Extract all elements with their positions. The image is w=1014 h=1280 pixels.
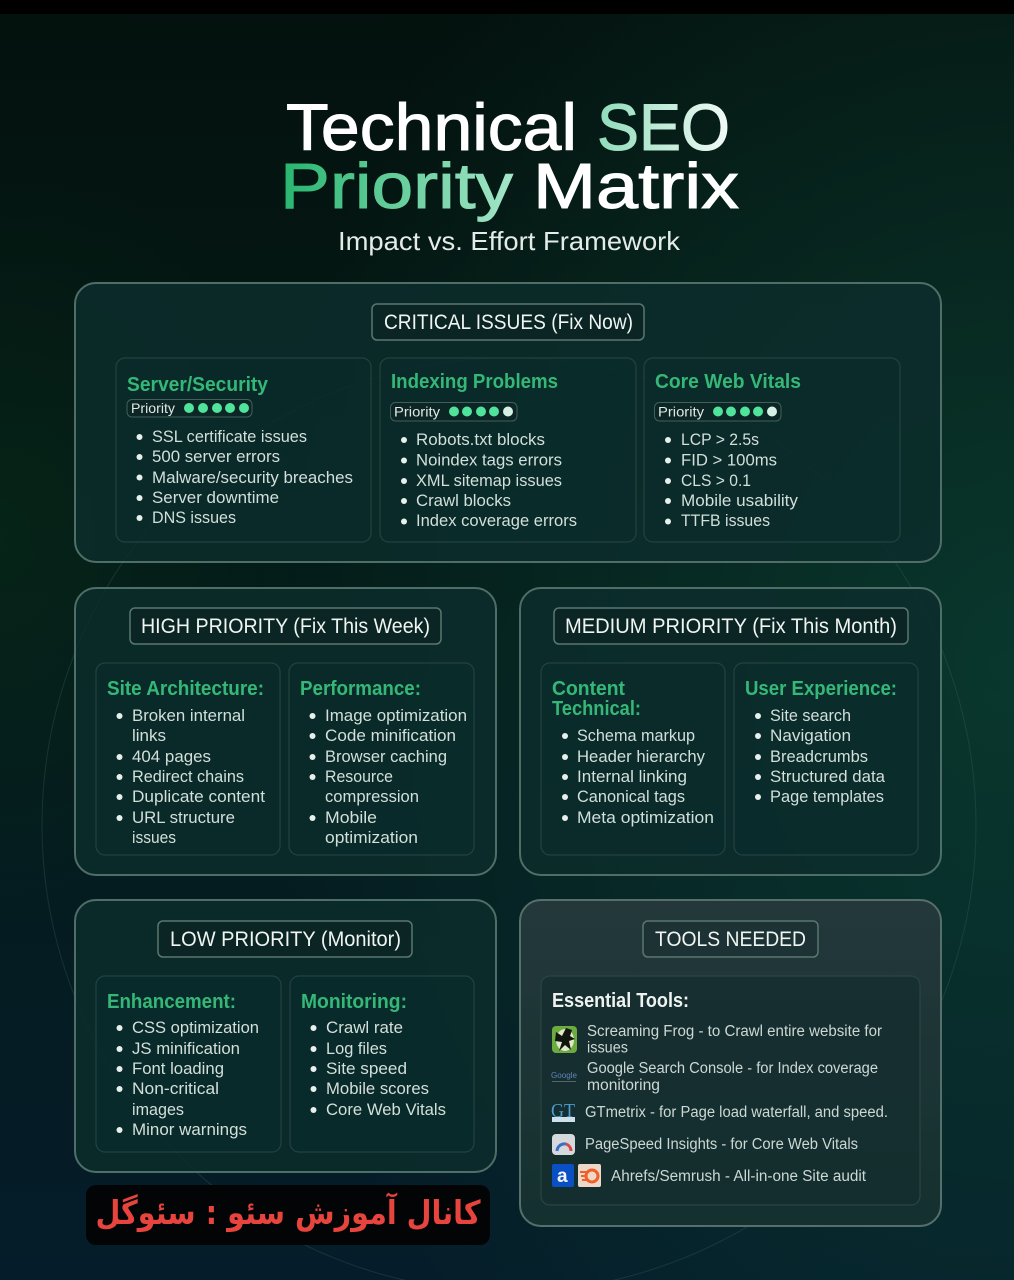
sub-panel: enhancement: CSS optimization	[132, 1018, 259, 1037]
sub-panel: user experience: User Experience:	[745, 678, 897, 700]
sub-panel: server/security: 500 server errors	[152, 447, 280, 466]
sub-panel: user experience: Structured data	[770, 767, 886, 786]
sub-panel: core web vitals: FID > 100ms	[681, 450, 777, 470]
sub-panel: performance: Performance:	[300, 678, 421, 700]
text: screaming frog	[587, 1023, 882, 1056]
sub-panel: indexing problems: Robots.txt blocks	[416, 430, 545, 449]
sub-panel: user experience: Page templates	[770, 787, 884, 806]
icon: gtmetrix: GT	[551, 1100, 575, 1122]
sub-panel: site architecture: issues	[132, 828, 176, 847]
sub-panel: user experience	[734, 663, 918, 855]
sub-panel: performance: optimization	[325, 828, 418, 847]
heading: critical issues: CRITICAL ISSUES (Fix Now)	[384, 311, 633, 334]
icon: ahrefs	[552, 1164, 574, 1187]
sub-panel: core web vitals: Core Web Vitals	[655, 371, 801, 393]
sub-panel: content technical: Schema markup	[577, 726, 695, 745]
sub-panel: performance: Mobile	[325, 808, 377, 827]
text: google search console: monitoring	[587, 1077, 660, 1094]
panel: high priority	[75, 588, 496, 875]
callout: persian channel label: کانال آموزش سئو : سئوگل	[95, 1192, 481, 1233]
sub-panel: essential tools	[541, 976, 920, 1205]
heading: tools needed: TOOLS NEEDED	[655, 928, 806, 951]
heading: low priority: LOW PRIORITY (Monitor)	[170, 928, 401, 951]
text: ahrefs/semrush: Ahrefs/Semrush - All-in-one Site audit	[611, 1168, 867, 1185]
sub-panel: monitoring: Log files	[326, 1039, 387, 1058]
sub-panel: monitoring: Crawl rate	[326, 1018, 403, 1037]
panel: critical issues	[75, 283, 941, 562]
callout: persian channel label	[86, 1185, 490, 1245]
sub-panel: user experience: Navigation	[770, 726, 851, 745]
sub-panel: indexing problems: Index coverage errors	[416, 511, 577, 530]
heading: critical issues	[372, 304, 644, 340]
sub-panel: content technical: Technical:	[552, 698, 641, 720]
panel: medium priority	[520, 588, 941, 875]
heading: low priority	[158, 921, 412, 957]
sub-panel: monitoring: Core Web Vitals	[326, 1100, 446, 1119]
sub-panel: indexing problems	[380, 358, 636, 542]
text: google search console: Google Search Console - for Index coverage	[587, 1060, 878, 1077]
sub-panel: site architecture: URL structure	[132, 808, 235, 827]
icon: semrush	[578, 1164, 601, 1187]
sub-panel: performance	[289, 663, 474, 855]
text: screaming frog: Screaming Frog - to Crawl entire website for	[587, 1023, 882, 1040]
icon: ahrefs: a	[557, 1166, 568, 1187]
sub-panel: content technical: Canonical tags	[577, 787, 685, 806]
sub-panel: performance: compression	[325, 787, 419, 806]
title: Priority	[280, 150, 513, 222]
sub-panel: indexing problems: Priority	[394, 404, 440, 420]
sub-panel: monitoring: Mobile scores	[326, 1079, 429, 1098]
sub-panel: core web vitals: TTFB issues	[681, 511, 770, 530]
icon: screaming frog	[552, 1026, 577, 1053]
title	[280, 90, 739, 222]
sub-panel: content technical	[541, 663, 725, 855]
sub-panel: site architecture: Broken internal	[132, 706, 245, 725]
sub-panel: enhancement: Font loading	[132, 1059, 224, 1078]
sub-panel: content technical: Internal linking	[577, 767, 687, 786]
sub-panel: performance: Browser caching	[325, 747, 447, 766]
sub-panel: indexing problems: Crawl blocks	[416, 491, 511, 510]
title: SEO	[597, 90, 730, 164]
sub-panel: site architecture: Site Architecture:	[107, 678, 264, 700]
text: gtmetrix: GTmetrix - for Page load waterfall, and speed.	[585, 1104, 888, 1121]
heading: medium priority	[554, 608, 908, 644]
title: Technical	[286, 90, 577, 164]
subtitle: Impact vs. Effort Framework	[338, 226, 681, 256]
sub-panel: server/security: Malware/security breaches	[152, 468, 353, 487]
sub-panel: server/security: Server/Security	[127, 374, 269, 396]
sub-panel: monitoring: Site speed	[326, 1059, 407, 1078]
sub-panel: monitoring	[290, 976, 474, 1152]
sub-panel: site architecture: 404 pages	[132, 747, 211, 766]
sub-panel: indexing problems: XML sitemap issues	[416, 471, 562, 490]
icon: pagespeed insights	[552, 1134, 575, 1155]
sub-panel: indexing problems: Indexing Problems	[391, 371, 558, 393]
sub-panel: content technical: Meta optimization	[577, 808, 714, 827]
sub-panel: server/security: Priority	[131, 400, 175, 416]
sub-panel: content technical: Content	[552, 678, 625, 700]
sub-panel: performance: Code minification	[325, 726, 456, 745]
sub-panel: core web vitals: Priority	[658, 404, 704, 420]
sub-panel: enhancement: Non-critical	[132, 1079, 219, 1098]
sub-panel: content technical: Header hierarchy	[577, 747, 705, 766]
sub-panel: enhancement: Enhancement:	[107, 991, 236, 1013]
sub-panel: user experience: Site search	[770, 706, 851, 725]
heading: high priority: HIGH PRIORITY (Fix This Week)	[141, 615, 430, 638]
sub-panel: server/security: SSL certificate issues	[152, 427, 307, 446]
panel: tools needed	[520, 900, 941, 1226]
sub-panel: site architecture: Duplicate content	[132, 787, 265, 806]
sub-panel: core web vitals: Mobile usability	[681, 491, 798, 510]
sub-panel: indexing problems: Noindex tags errors	[416, 450, 562, 470]
sub-heading: essential tools: Essential Tools:	[552, 990, 689, 1012]
sub-panel: core web vitals	[644, 358, 900, 542]
sub-panel: enhancement: Minor warnings	[132, 1120, 247, 1139]
text: google search console	[587, 1060, 878, 1094]
sub-panel: server/security	[116, 358, 371, 542]
sub-panel: site architecture: Redirect chains	[132, 767, 244, 786]
sub-panel: site architecture	[96, 663, 280, 855]
heading: medium priority: MEDIUM PRIORITY (Fix This Month)	[565, 615, 897, 638]
sub-panel: user experience: Breadcrumbs	[770, 747, 868, 766]
sub-panel: site architecture: links	[132, 726, 166, 745]
sub-panel: performance: Image optimization	[325, 706, 467, 725]
sub-panel: enhancement: images	[132, 1100, 184, 1119]
sub-panel: enhancement	[96, 976, 281, 1152]
sub-panel: server/security: DNS issues	[152, 508, 236, 527]
icon: google: Google	[551, 1071, 578, 1080]
heading: high priority	[130, 608, 441, 644]
text: pagespeed insights: PageSpeed Insights - for Core Web Vitals	[585, 1136, 858, 1153]
title: Matrix	[533, 150, 739, 222]
heading: tools needed	[643, 921, 818, 957]
sub-panel: monitoring: Monitoring:	[301, 991, 407, 1013]
sub-panel: enhancement: JS minification	[132, 1039, 240, 1058]
sub-panel: performance: Resource	[325, 767, 393, 786]
sub-panel: server/security: Server downtime	[152, 488, 279, 507]
sub-panel: core web vitals: CLS > 0.1	[681, 471, 751, 490]
sub-panel: core web vitals: LCP > 2.5s	[681, 430, 759, 449]
text: screaming frog: issues	[587, 1040, 628, 1056]
panel: low priority	[75, 900, 496, 1172]
